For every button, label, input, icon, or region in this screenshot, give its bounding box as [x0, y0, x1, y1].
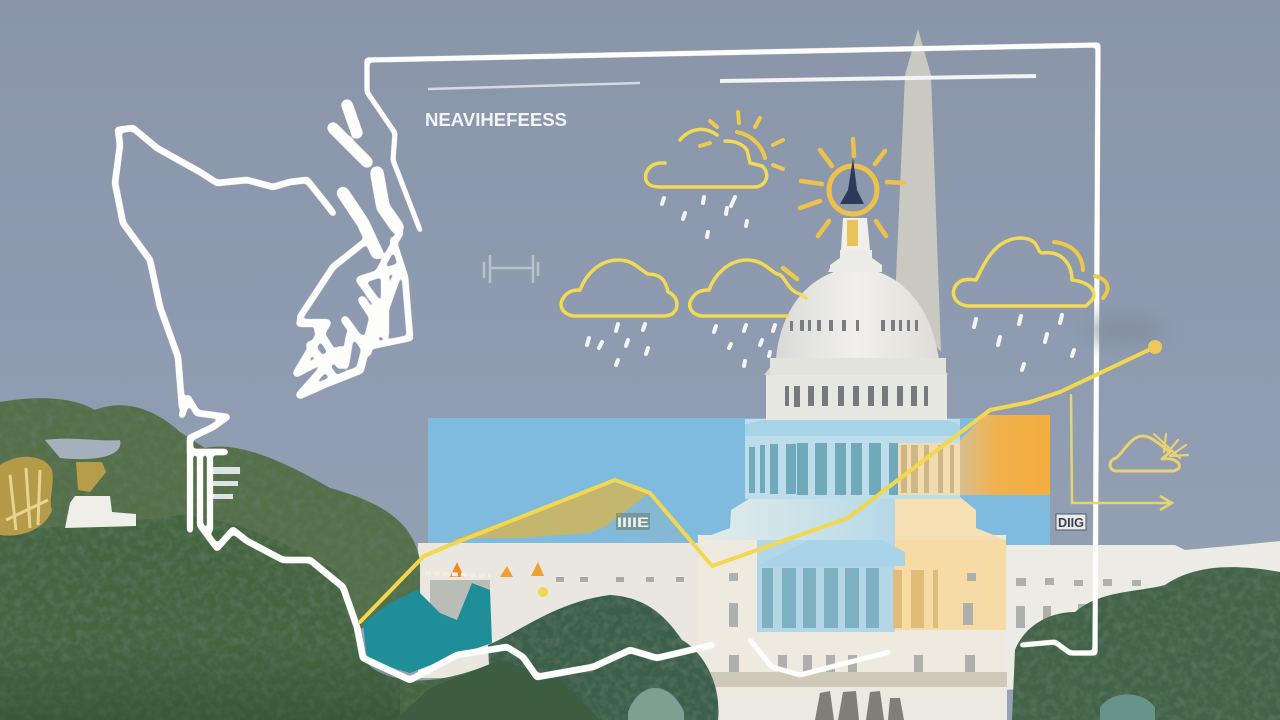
right tree: [1012, 567, 1280, 720]
pale legend dash: [425, 573, 490, 576]
top left rule: [428, 83, 640, 89]
dome: [764, 268, 948, 375]
puget sound middle: [377, 173, 397, 227]
lantern yellow: [847, 220, 858, 246]
icon: small cloud right: [1110, 434, 1188, 471]
gazebo dome right: [1100, 694, 1155, 720]
left tree group: [0, 398, 560, 720]
left wing shadowed arcade: [430, 580, 490, 640]
right wing windows: [729, 573, 1141, 677]
teal area: [363, 583, 492, 673]
icon: rain cloud middle: [690, 260, 806, 316]
puget sound lines: [300, 233, 410, 347]
dome base band: [770, 358, 946, 375]
arrow tip: [1148, 340, 1162, 354]
upper drum windows: [785, 386, 928, 407]
western coast and southern border: [115, 128, 333, 407]
chart label center: IIIIE: [617, 514, 649, 530]
low bushes foreground: [395, 660, 600, 720]
capitol building: [418, 218, 1280, 720]
main tree: [0, 515, 560, 720]
bar chart background panel: [428, 418, 1050, 548]
lower tree shading: [0, 640, 400, 720]
colonnade cornice: [745, 420, 960, 436]
chart label right: DIIG: [1058, 515, 1084, 530]
puget sound tangle: [297, 267, 400, 395]
portico columns: [762, 568, 879, 628]
gold foliage right: [76, 462, 106, 492]
columbia river squiggle: [182, 398, 227, 452]
blue colonnade drum: [745, 419, 960, 499]
right wing: [1003, 541, 1280, 690]
map outline: [115, 45, 1098, 680]
orange markers: [450, 562, 464, 577]
washington monument: [895, 29, 941, 352]
scale bar icon: [484, 255, 538, 283]
icon: rain cloud left: [561, 260, 677, 316]
terrace plinth: [712, 687, 1007, 720]
white building fragment: [65, 496, 136, 528]
state outline and frame: [367, 45, 1098, 653]
icon: sun arc beside middle cloud: [783, 268, 797, 279]
chart label center: [616, 513, 650, 530]
yellow dot: [538, 587, 548, 597]
orange marker third: [531, 562, 544, 576]
smudge behind arrow tip: [1087, 314, 1163, 346]
orange tinted portico: [895, 540, 1006, 630]
mid tree: [488, 595, 718, 720]
center block: [698, 535, 1006, 720]
rain drops: [587, 197, 1074, 370]
river parallel lines: [190, 452, 210, 530]
orange columns: [893, 570, 938, 628]
tree far silhouette: [0, 398, 420, 640]
gold foliage highlights: [6, 468, 48, 530]
gold area under line: [452, 483, 648, 540]
pale clearing in treetops: [45, 439, 120, 459]
blue tinted portico: [757, 540, 895, 632]
left wing windows: [556, 577, 684, 582]
distant pale building left: [0, 408, 38, 454]
small chart axis arrow: [1071, 394, 1172, 510]
trend line: [360, 340, 1162, 622]
colonnade openings: [749, 443, 898, 495]
orange marker second: [500, 566, 513, 577]
weather icons: [561, 112, 1188, 471]
faint border over building: [750, 640, 889, 675]
orange tint on drum base: [895, 497, 1006, 540]
upper drum: [766, 374, 947, 420]
top right rule: [720, 76, 1036, 81]
southern border: [200, 525, 712, 680]
gold foliage left: [0, 457, 53, 536]
terrace: [702, 672, 1007, 696]
lower drum base: [698, 497, 895, 540]
pediment: [757, 521, 905, 566]
orange bar: [960, 415, 1050, 495]
dome ribs and windows: [790, 320, 918, 331]
lantern spire dark: [840, 158, 864, 204]
puget sound inner: [343, 193, 377, 253]
left wing: [418, 543, 703, 678]
lantern base: [828, 250, 882, 272]
mini legend with stars: [425, 562, 548, 597]
gazebo dome bottom: [628, 688, 684, 720]
icon: rain cloud right: [953, 238, 1108, 306]
heading label: NEAVIHEFEESS: [425, 109, 567, 130]
blue wedge right of gold area: [600, 494, 695, 541]
lantern: [841, 218, 870, 250]
icon: sun behind lantern: [800, 139, 904, 236]
colonnade orange column gaps: [901, 445, 954, 493]
puget sound islands: [333, 105, 367, 162]
icon: cloud top with sun: [646, 112, 783, 187]
colonnade orange tint: [898, 443, 960, 495]
statues: [815, 691, 904, 720]
distant building strips: [213, 467, 240, 499]
